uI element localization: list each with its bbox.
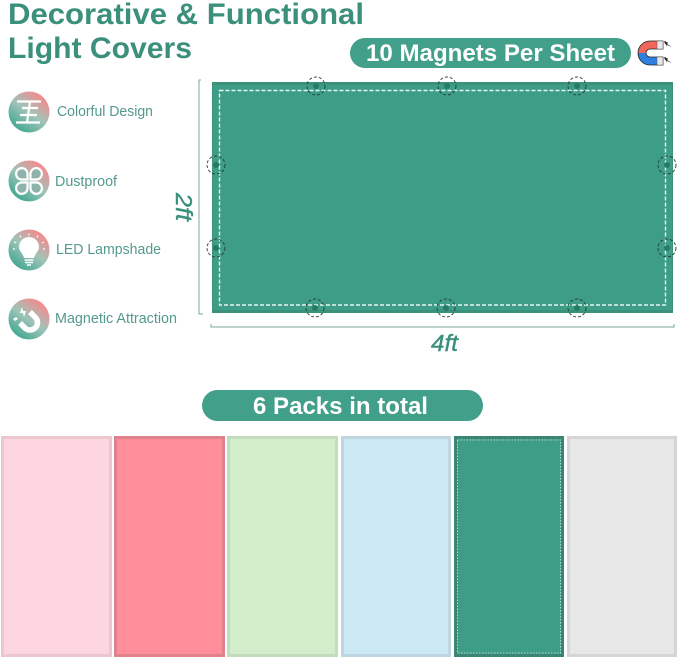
label: LED lampshade: LED Lampshade — [56, 242, 161, 258]
label: dustproof: Dustproof — [55, 174, 118, 190]
label: magnetic attraction: Magnetic Attraction — [55, 311, 177, 327]
title — [8, 0, 364, 65]
swatch: coral red — [116, 438, 224, 656]
pill: 6 packs in total: 6 Packs in total — [253, 393, 428, 420]
label: colorful design: Colorful Design — [57, 104, 153, 120]
swatch: teal — [456, 438, 562, 656]
icon: magnet — [8, 298, 50, 340]
feature: magnetic attraction — [8, 298, 177, 340]
feature: LED lampshade — [8, 230, 161, 270]
swatch: light green — [228, 438, 336, 656]
swatch: light pink — [2, 438, 110, 656]
magnet markers — [213, 83, 670, 311]
icon: dustproof — [8, 160, 50, 202]
icon: horseshoe magnet — [638, 41, 672, 65]
icon: colorful design — [8, 92, 50, 132]
pill: 6 packs in total — [202, 390, 483, 421]
swatch: light blue — [342, 438, 450, 656]
pill: 10 magnets per sheet: 10 Magnets Per Sheet — [366, 40, 615, 67]
feature: dustproof — [8, 160, 118, 202]
dimension label: 2ft: 2ft — [171, 192, 197, 223]
stitched border — [220, 90, 666, 305]
main sheet — [207, 77, 676, 317]
dimension label: 4ft: 4ft — [431, 330, 460, 356]
dimension bracket: height — [199, 80, 203, 314]
feature: colorful design — [8, 92, 153, 132]
icon: light bulb — [8, 230, 50, 270]
dimension bracket: width — [211, 324, 674, 327]
title: Light Covers — [8, 32, 192, 65]
swatch: light gray — [568, 438, 676, 656]
swatches — [2, 438, 676, 656]
